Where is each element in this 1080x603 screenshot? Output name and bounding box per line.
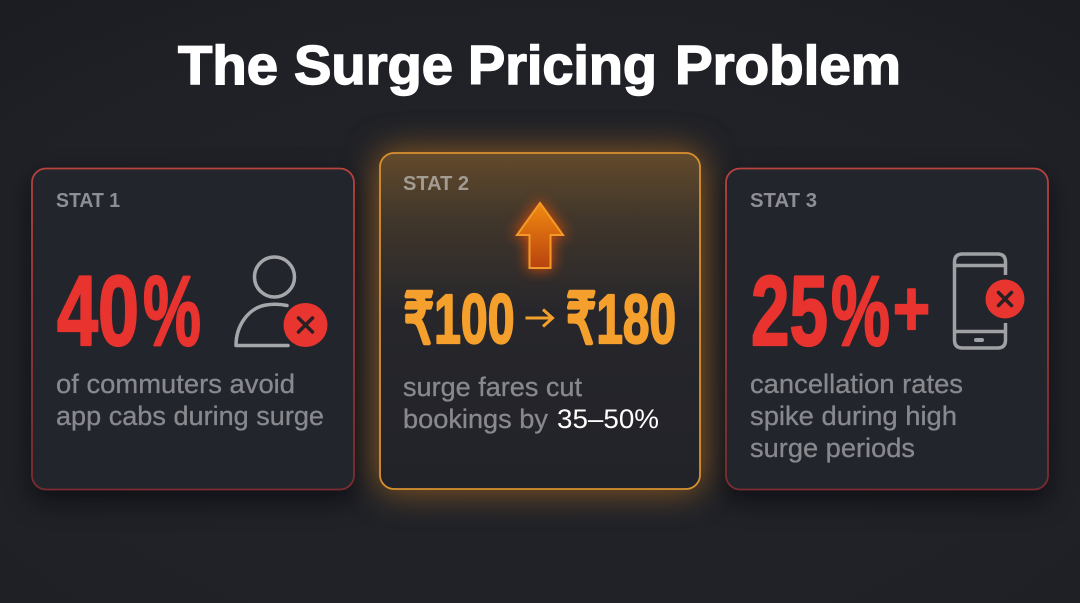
stat 2 description: 35–50%	[557, 404, 659, 434]
stat 2 description	[403, 372, 659, 434]
stat 2 value: ₹100	[404, 280, 514, 358]
stat 2 value: ₹180	[566, 280, 676, 358]
stat 3 description	[750, 369, 963, 463]
stat 2 label: STAT 2	[403, 173, 469, 195]
icon: person with x	[236, 257, 328, 347]
stat 1 value: 40	[57, 255, 139, 366]
panel: stat 2	[380, 153, 700, 489]
stat 3 value: 25	[751, 255, 828, 366]
stat 2 description: bookings by	[403, 404, 548, 434]
stat 3 description: cancellation rates	[750, 369, 963, 399]
title	[178, 34, 901, 96]
stat 2 value	[404, 280, 676, 358]
stat 2 description: surge fares cut	[403, 372, 582, 402]
title: Surge	[294, 34, 453, 96]
stat 3 label: STAT 3	[750, 190, 817, 212]
stat 1 description: app cabs during surge	[56, 401, 324, 431]
stat 3 description: surge periods	[750, 433, 915, 463]
title: The	[178, 34, 278, 96]
stat 1 label: STAT 1	[56, 190, 120, 212]
stat 3 description: spike during high	[750, 401, 957, 431]
arrow: price increase	[526, 310, 552, 326]
stat 3 value	[751, 255, 930, 366]
panel: stat 3	[726, 168, 1048, 490]
stat 1 value: %	[143, 255, 201, 366]
panel: stat 1	[32, 168, 354, 490]
stat 1 description: of commuters avoid	[56, 369, 295, 399]
stat 1 description	[56, 369, 324, 431]
icon: up arrow	[516, 203, 564, 268]
stat 3 value: +	[893, 264, 930, 352]
title: Problem	[675, 34, 901, 96]
stat 3 value: %	[831, 255, 890, 366]
title: Pricing	[468, 34, 657, 96]
icon: phone with x	[954, 254, 1024, 348]
